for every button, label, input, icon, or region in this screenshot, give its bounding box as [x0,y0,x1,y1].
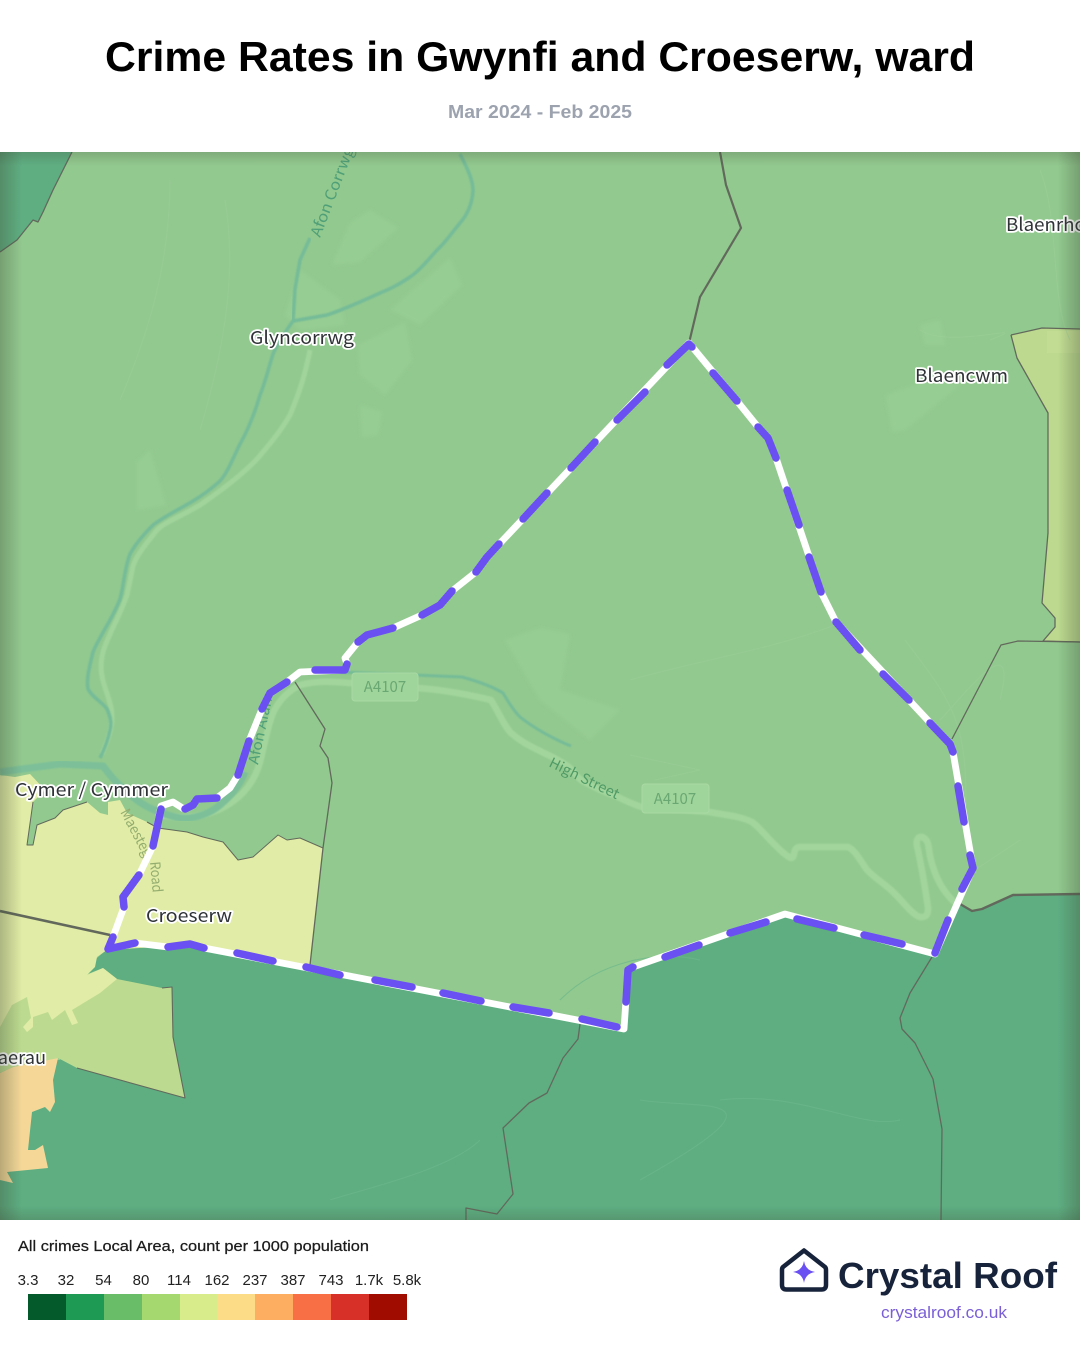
area: light olive east [1011,328,1080,642]
area: pale yellow Croeserw [0,774,323,1032]
faint tracks in the south [330,956,900,1200]
legend scale labels: 32 [58,1272,74,1289]
legend scale labels: 80 [133,1272,149,1289]
place label: Croeserw: Croeserw [146,902,232,928]
logo: Crystal Roof [782,1250,1058,1322]
river: quarry stream [340,672,571,746]
map base: main green area [0,152,1080,1060]
ward boundary: purple dashes [108,344,973,1027]
area: orange Maerau [0,1058,58,1183]
area: olive south-west [0,968,185,1098]
road: Glyncorrwg valley road [101,350,310,754]
legend colour bar [28,1294,407,1320]
road shield: A4107 east: A4107 [654,788,696,809]
wordmark: Crystal Roof [838,1255,1058,1296]
road shield: A4107 east [642,784,709,813]
legend scale labels [18,1272,422,1289]
river: northern stream [293,238,310,321]
legend scale labels: 114 [167,1272,191,1289]
legend scale labels: 3.3 [18,1272,38,1289]
river: Afon Corrwg and valley [87,154,473,758]
legend scale labels: 5.8k [393,1272,422,1289]
faint tracks [1066,330,1070,340]
place label: Cymer: Cymer / Cymmer [15,776,169,802]
area: dark green north-west corner [0,152,72,252]
street label: High Street: High Street [546,753,624,804]
legend scale labels: 237 [242,1272,268,1289]
legend scale labels: 743 [318,1272,344,1289]
river label: Afon Corrwg: Afon Corrwg [305,143,359,240]
legend title: All crimes Local Area, count per 1000 population [18,1238,369,1255]
street label: Road: Road [145,861,168,893]
area: dark green south [0,894,1080,1220]
road: A4107 [160,682,958,917]
road shield: A4107 west: A4107 [364,676,406,697]
area: lighter patch east [1047,331,1080,353]
title: Crime Rates in Gwynfi and Croeserw, ward [105,33,975,80]
legend scale labels: 54 [95,1272,112,1289]
boundaries [0,152,1080,1220]
road shield: A4107 west [352,673,418,701]
faint settlement patches [137,210,960,740]
subtitle: date range: Mar 2024 - Feb 2025 [448,101,632,122]
place label: Glyncorrwg: Glyncorrwg [250,324,354,350]
legend scale labels: 1.7k [355,1272,384,1289]
place label: Blaencwm: Blaencwm [915,362,1008,388]
river: Afan bend [0,764,245,818]
legend [18,1238,422,1320]
map panel [0,143,1080,1220]
legend scale labels: 162 [204,1272,230,1289]
website url: crystalroof.co.uk [881,1304,1008,1322]
map edge shading [0,152,1080,1220]
river label: Afon Afan: Afon Afan [243,695,277,766]
icon: house with star [782,1250,826,1290]
ward boundary: white underlay [108,343,973,1029]
street label: Maesteg: Maesteg [116,805,158,860]
legend scale labels: 387 [280,1272,306,1289]
